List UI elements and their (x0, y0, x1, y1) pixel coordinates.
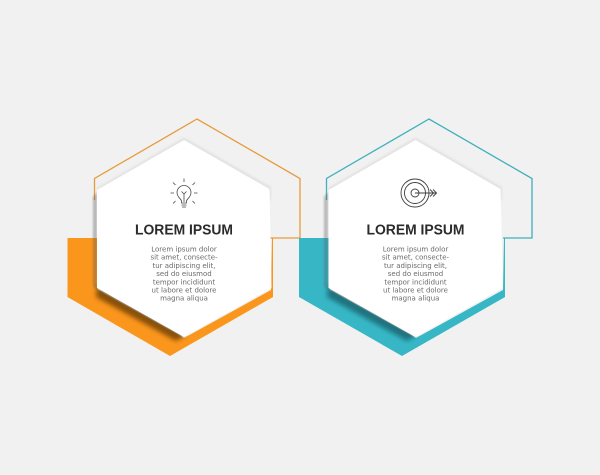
accent: teal hexagon base (299, 238, 505, 356)
text block: sed do eiusmod (388, 270, 443, 278)
icon: light bulb (170, 178, 198, 207)
outline: teal hexagon (326, 119, 532, 238)
shadow: light upper edge (328, 138, 502, 200)
text block: sit amet, consecte- (150, 254, 218, 262)
text block: tur adipiscing elit, (384, 262, 447, 270)
card: white hexagon (328, 140, 503, 337)
outline: orange hexagon (94, 119, 300, 238)
text block: tempor incididunt (384, 278, 447, 286)
shadow: dark lower left edge (96, 286, 186, 341)
text block: Lorem ipsum dolor (383, 246, 448, 254)
accent: orange hexagon base (68, 238, 273, 356)
text block: magna aliqua (392, 295, 439, 303)
text block: ut labore et dolore (152, 286, 216, 294)
heading: LOREM IPSUM (366, 222, 464, 238)
text block (382, 246, 450, 303)
icon: target with arrow (401, 179, 436, 207)
panel: step two (299, 119, 532, 356)
shadow: light upper edge (97, 138, 271, 200)
heading: LOREM IPSUM (135, 222, 233, 238)
text block: sed do eiusmod (156, 270, 212, 278)
text block: sit amet, consecte- (382, 254, 450, 262)
shadow: dark lower left edge (327, 286, 417, 341)
shadow: left edge (324, 192, 328, 290)
shadow: left edge (93, 192, 97, 290)
panel: step one (68, 119, 300, 356)
text block: tur adipiscing elit, (152, 262, 216, 270)
text block: magna aliqua (160, 295, 208, 303)
text block (150, 246, 218, 303)
text block: ut labore et dolore (383, 286, 448, 294)
text block: Lorem ipsum dolor (151, 246, 217, 254)
card: white hexagon (97, 140, 272, 337)
text block: tempor incididunt (153, 278, 215, 286)
